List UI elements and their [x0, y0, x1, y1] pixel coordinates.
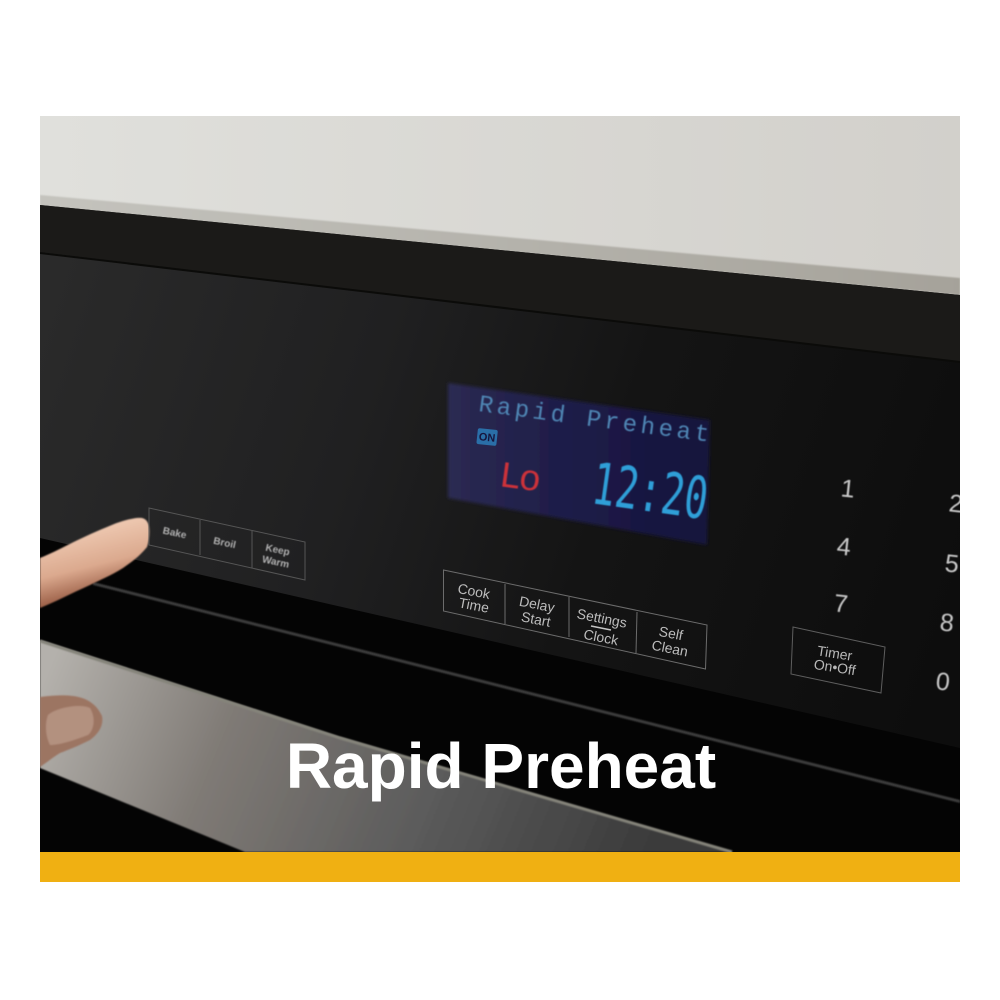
ON indicator: ON: [478, 431, 496, 445]
number keypad: 1: [839, 474, 856, 504]
number keypad: 5: [943, 549, 960, 579]
yellow footer bar: [40, 852, 960, 882]
label: Keep Warm: Keep: [264, 543, 291, 558]
number keypad: 4: [835, 532, 852, 562]
label: Settings Clock: Settings: [576, 605, 628, 631]
label: Broil: Broil: [212, 536, 237, 551]
panel top band: [40, 205, 960, 362]
thumb on handle: [40, 695, 102, 767]
steel top trim: [40, 195, 960, 295]
Timer On-Off button: [791, 627, 885, 693]
label: Keep Warm: [262, 543, 290, 568]
number keypad: 7: [832, 589, 849, 619]
label: Cook Time: Cook: [456, 580, 493, 602]
Timer On-Off button: On•Off: [813, 656, 857, 678]
display clock: 12:20: 12:20: [588, 450, 712, 533]
photo: oven control panel: [40, 116, 964, 852]
label: Keep Warm: Warm: [261, 554, 290, 571]
number keypad: 8: [938, 608, 955, 638]
label: Delay Start: [520, 596, 555, 627]
label: Cook Time: [458, 584, 490, 612]
display background: [448, 383, 710, 545]
display text: Rapid Preheat: Rapid Preheat: [477, 392, 710, 450]
number keypad: 0: [934, 667, 951, 697]
button group: Bake, Broil, Keep Warm: [149, 508, 305, 580]
Timer On-Off button: Timer: [816, 642, 854, 664]
finger pressing Bake: [40, 518, 150, 608]
number keypad: 2: [947, 489, 964, 519]
display temperature: Lo: Lo: [496, 456, 544, 503]
ON indicator: [476, 428, 498, 446]
digital display: [448, 383, 712, 545]
label: Self Clean: [652, 626, 687, 656]
handle top edge: [40, 641, 732, 852]
label: Delay Start: Delay: [518, 593, 556, 615]
label: Self Clean: Clean: [650, 637, 689, 659]
label: Settings Clock: [577, 609, 626, 646]
infographic canvas: [40, 116, 960, 882]
stainless door handle: [40, 640, 732, 852]
label: Settings Clock: Clock: [582, 626, 621, 648]
label: Bake: Bake: [162, 526, 188, 542]
black photo base: [40, 538, 960, 852]
wall above oven: [40, 116, 960, 295]
label: Cook Time: Time: [457, 594, 491, 616]
oven control panel body: [40, 205, 960, 748]
label: Delay Start: Start: [520, 608, 552, 630]
label: Self Clean: Self: [658, 623, 684, 643]
door edge highlight: [93, 582, 960, 803]
title: Rapid Preheat: [286, 730, 716, 802]
button group: Cook Time, Delay Start, Settings Clock, Self Clean: [444, 570, 707, 669]
number keypad: [832, 474, 964, 697]
thumbnail: [46, 706, 94, 745]
